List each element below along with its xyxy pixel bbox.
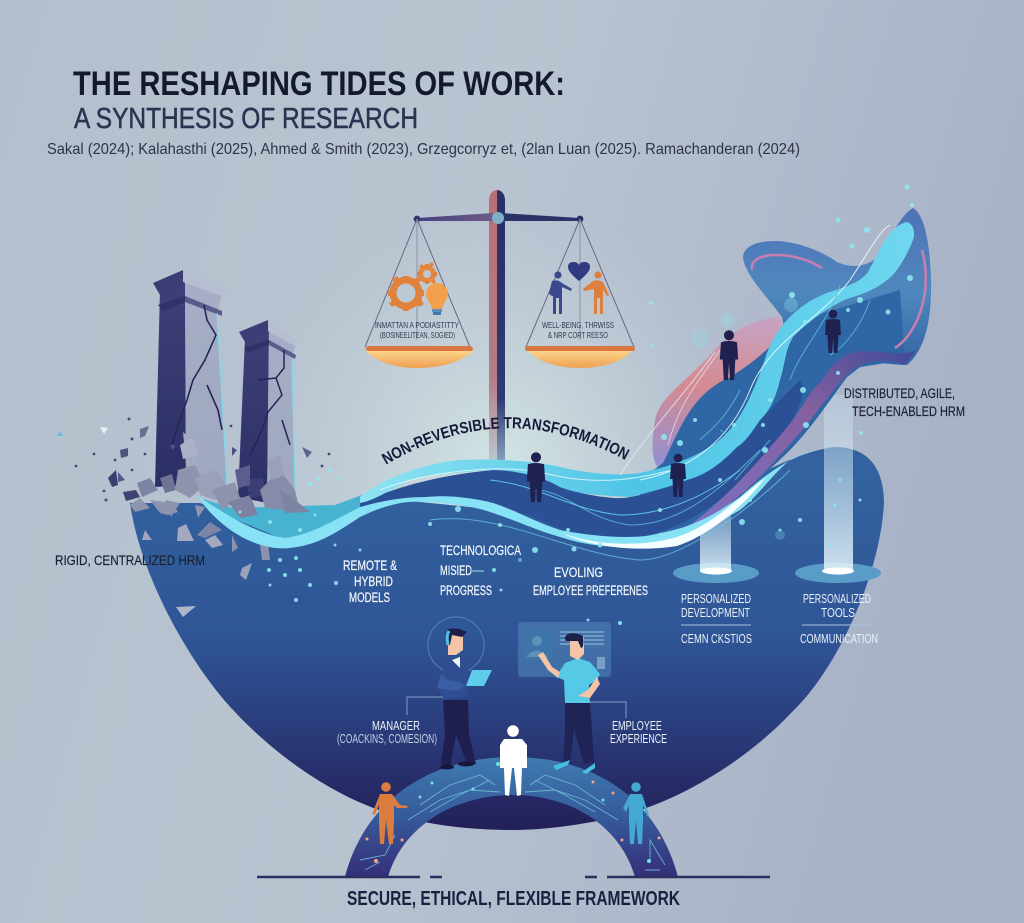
right pan (525, 219, 635, 368)
label: distributed hrm (844, 385, 965, 419)
left pan label (375, 320, 459, 340)
citations: Sakal (2024); Kalahasthi (2025), Ahmed & Smith (2023), Grzegcorryz et, (2Ɩan Luan (2025). Ramachanderan (2024) (47, 141, 800, 158)
label: personalized tools: PERSONALIZED (803, 591, 871, 606)
heading: non-reversible transformation: NON-REVERSIBLE TRANSFORMATION (381, 417, 630, 464)
rubble and debris (57, 418, 330, 617)
label: distributed hrm: DISTRIBUTED, AGILE, (844, 385, 955, 401)
label: employee experience: EMPLOYEE (612, 719, 662, 733)
label: rigid hrm: RIGID, CENTRALIZED HRM (55, 552, 205, 568)
particles (238, 184, 914, 625)
bowl (130, 447, 884, 830)
employee screen (518, 622, 611, 677)
label: personalized development: CEMN CKSTIOS (681, 631, 752, 646)
middle body between ribbons (360, 380, 803, 538)
scale pole (489, 190, 505, 480)
right pan label (542, 320, 614, 340)
label: employee experience (590, 702, 667, 746)
figure: employee (538, 633, 600, 774)
blue upper blob (743, 208, 931, 377)
left pan (365, 219, 473, 368)
label: manager: MANAGER (372, 719, 420, 733)
icon: light bulb (426, 283, 448, 315)
right pan label: WELL-BEING, THRWISS (542, 320, 614, 330)
label: personalized development: PERSONALIZED (681, 591, 751, 606)
balance scale (365, 190, 635, 480)
purple band (690, 350, 917, 525)
label: personalized tools: COMMUNICATION (800, 631, 878, 646)
label: remote and hybrid models (343, 557, 397, 605)
figure: orange person (372, 782, 408, 844)
subtitle: A SYNTHESIS OF RESEARCH (74, 103, 418, 135)
label: employee experience: EXPERIENCE (610, 732, 667, 746)
label: personalized development (681, 591, 752, 646)
icon: people shaking hands (549, 271, 609, 314)
label: personalized development: DEVELOPMENT (681, 605, 750, 620)
lower cyan ribbon (197, 447, 837, 548)
label: technological progress: PROGRESS (440, 582, 492, 598)
wave people (527, 310, 841, 502)
label: personalized tools (800, 591, 878, 646)
footer heading: framework: SECURE, ETHICAL, FLEXIBLE FRAMEWORK (347, 888, 680, 910)
stream lines (380, 225, 890, 560)
arch: framework circuit bridge (345, 757, 678, 877)
figure: blue person (623, 782, 649, 844)
pink accent lines (752, 250, 926, 348)
salmon blob (653, 317, 800, 470)
label: personalized tools: TOOLS (821, 605, 855, 620)
lower blue body (640, 290, 905, 540)
label: remote and hybrid models: REMOTE & (343, 557, 397, 573)
scale beam (414, 212, 583, 224)
water pool (200, 495, 362, 540)
manager halo (428, 617, 484, 673)
figure: manager (437, 628, 492, 770)
label: manager: (COACKINS, COMESION) (337, 732, 437, 746)
icon: heart (568, 262, 590, 281)
figure: white centre person (500, 725, 527, 796)
label: remote and hybrid models: MODELS (349, 589, 390, 605)
spotlight: development (673, 500, 759, 583)
upper cyan ribbon (360, 222, 914, 503)
icon: gears (388, 262, 437, 311)
label: technological progress: MISIED (440, 562, 472, 578)
ground line (257, 876, 770, 878)
left pan label: INMATTAN A PODIASTITTY (375, 320, 459, 330)
pillar: small (238, 320, 298, 503)
wave: transformation stream (197, 208, 931, 560)
white ribbon core (560, 478, 765, 549)
label: technological progress (440, 542, 521, 598)
label: manager (337, 697, 443, 746)
spotlight: tools (795, 395, 881, 583)
label: technological progress: TECHNOLOGICA (440, 542, 521, 558)
left pan label: (BOSINEELITEAN, SOGIED) (380, 330, 455, 340)
pillar: large (153, 270, 227, 487)
label: evolving employee preferences: EMPLOYEE PREFERENES (533, 582, 648, 598)
label: remote and hybrid models: HYBRID (354, 573, 393, 589)
title: THE RESHAPING TIDES OF WORK: (73, 65, 565, 103)
label: evolving employee preferences: EVOLING (554, 564, 603, 580)
label: distributed hrm: TECH-ENABLED HRM (852, 403, 965, 419)
right pan label: & NRP CORT REESO (548, 330, 608, 340)
label: evolving employee preferences (533, 564, 648, 598)
